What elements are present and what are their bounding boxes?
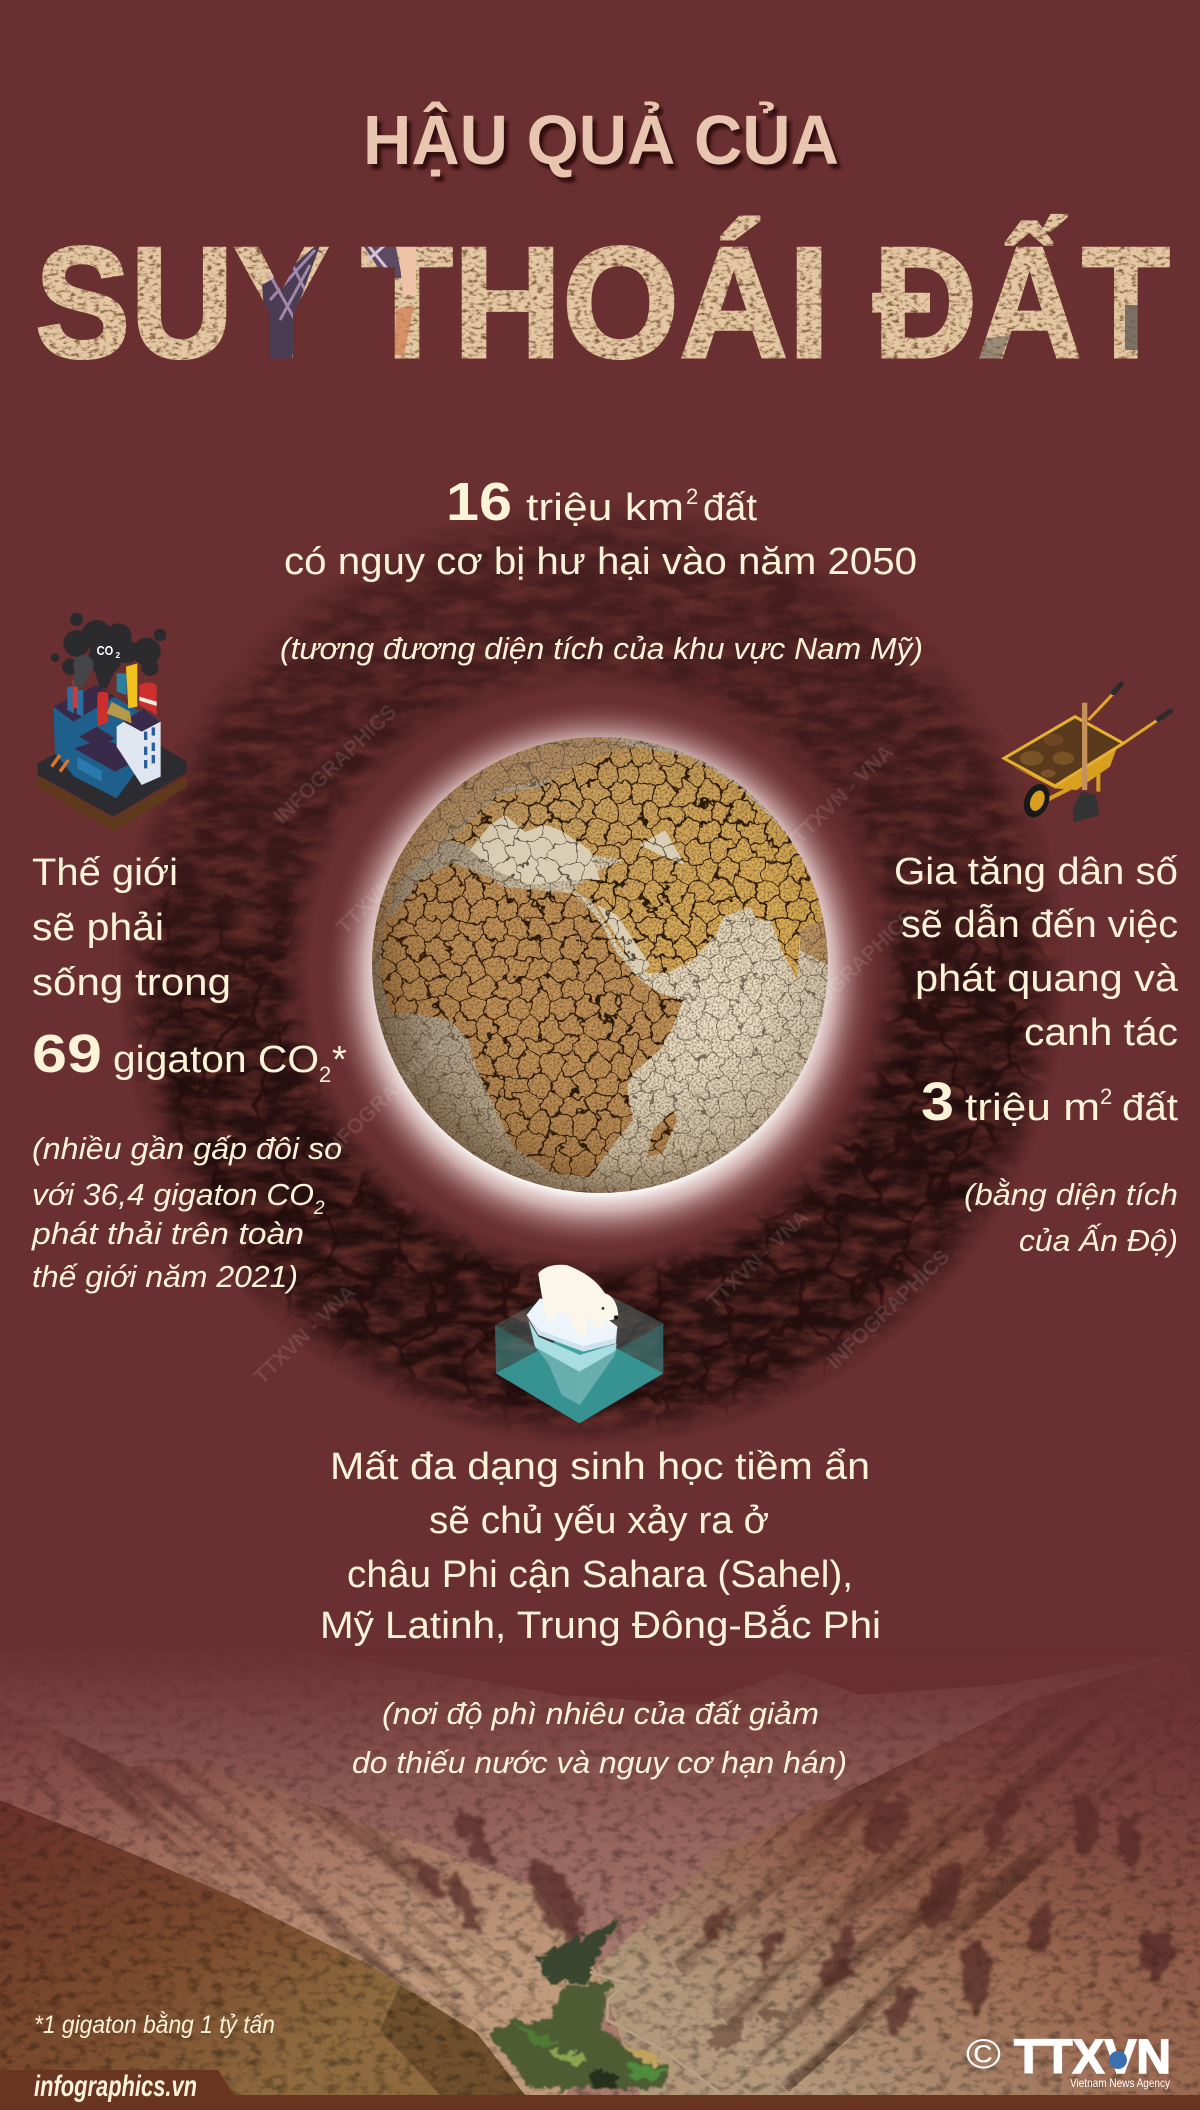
- cracks: sea: [360, 725, 840, 1205]
- text block: CO2 left: 2: [313, 1198, 325, 1219]
- title line 2 textured: [35, 215, 1170, 391]
- text block: CO2 left: 69: [32, 1024, 102, 1084]
- text block: top statistic: đất: [703, 487, 757, 529]
- text block: population right: sẽ dẫn đến việc: [901, 903, 1178, 946]
- text block: biodiversity: Mỹ Latinh, Trung Đông-Bắc Phi: [320, 1604, 881, 1647]
- seas: [470, 815, 685, 975]
- text block: CO2 left: phát thải trên toàn: [31, 1216, 304, 1251]
- icon: factory with CO2 smoke: 2: [116, 651, 121, 660]
- logo: TTXVN: TTXVN: [1014, 2031, 1171, 2084]
- cracked earth ring: [123, 506, 1062, 1442]
- text block: CO2 left: [31, 852, 347, 1294]
- text block: biodiversity: (nơi độ phì nhiêu của đất giảm: [382, 1696, 819, 1731]
- text block: top statistic: có nguy cơ bị hư hại vào năm 2050: [284, 541, 917, 583]
- globe glow: [325, 700, 875, 1250]
- icon: factory with CO2 smoke: [38, 613, 187, 832]
- watermarks: [249, 700, 954, 1389]
- text block: CO2 left: với 36,4 gigaton CO: [32, 1177, 314, 1212]
- footnote: *1 gigaton bằng 1 tỷ tấn: [34, 2010, 275, 2039]
- watermarks: TTXVN: [332, 874, 398, 939]
- title line 2 textured: THOÁI: [361, 215, 830, 391]
- text block: top statistic: 16: [446, 472, 512, 532]
- title line 1: HẬU QUẢ CỦA: [363, 100, 839, 179]
- globe: cracked earth: [360, 725, 840, 1205]
- dark rock patches: [409, 1785, 1173, 2036]
- text block: population right: của Ấn Độ): [1019, 1222, 1178, 1258]
- watermarks: TTXVN - VNA: [702, 1205, 813, 1314]
- watermarks: TTXVN - VNA: [249, 1280, 360, 1389]
- watermarks: INFOGRAPHICS: [787, 905, 919, 1034]
- text block: CO2 left: sẽ phải: [32, 907, 164, 949]
- title line 2 textured: SUY: [35, 215, 329, 391]
- title line 2 textured: ĐẤT: [873, 215, 1170, 391]
- text block: population right: phát quang và: [915, 958, 1179, 1000]
- cracks: land: [381, 748, 819, 1177]
- text block: population right: [894, 851, 1179, 1258]
- text block: population right: 3: [921, 1072, 954, 1132]
- text block: biodiversity: [320, 1446, 881, 1780]
- text block: biodiversity: do thiếu nước và nguy cơ hạn hán): [352, 1745, 847, 1780]
- logo: TTXVN: [966, 2030, 1171, 2090]
- text block: top statistic: triệu km: [526, 487, 684, 529]
- text block: population right: (bằng diện tích: [964, 1177, 1178, 1212]
- watermarks: TTXVN - VNA: [787, 740, 898, 849]
- text block: biodiversity: sẽ chủ yếu xảy ra ở: [429, 1500, 769, 1542]
- text block: CO2 left: (nhiều gần gấp đôi so: [32, 1131, 342, 1166]
- source site: infographics.vn: [34, 2070, 197, 2103]
- icon: polar bear on melting ice: [495, 1265, 663, 1423]
- text block: biodiversity: Mất đa dạng sinh học tiềm ẩn: [330, 1446, 870, 1488]
- mountain landscape: [0, 1568, 1200, 2097]
- land: Madagascar: [647, 1110, 677, 1157]
- text block: population right: 2: [1100, 1084, 1112, 1109]
- logo: TTXVN: ©: [966, 2030, 1001, 2077]
- watermarks: INFOGRAPHICS: [822, 1245, 954, 1374]
- icon: factory with CO2 smoke: CO: [97, 644, 113, 658]
- watermarks: INFOGRAPHICS: [317, 1035, 449, 1164]
- land: Africa: [380, 863, 683, 1177]
- text block: top statistic: [280, 472, 923, 666]
- footer bar: [0, 2070, 1200, 2110]
- text block: population right: đất: [1122, 1087, 1178, 1129]
- text block: top statistic: 2: [686, 484, 698, 509]
- text block: population right: triệu m: [965, 1087, 1100, 1129]
- text block: CO2 left: 2: [319, 1062, 331, 1087]
- watermarks: INFOGRAPHICS: [269, 700, 401, 829]
- text block: CO2 left: *: [332, 1039, 347, 1081]
- text block: population right: canh tác: [1024, 1012, 1178, 1054]
- icon: wheelbarrow with shovel: [1004, 684, 1171, 822]
- valley road: [590, 1972, 720, 2093]
- logo: TTXVN: Vietnam News Agency: [1070, 2076, 1170, 2090]
- land: Eurasia: [450, 747, 823, 980]
- text block: CO2 left: sống trong: [32, 962, 231, 1004]
- text block: CO2 left: Thế giới: [32, 852, 178, 894]
- valley vegetation: [488, 1918, 668, 2088]
- text block: population right: Gia tăng dân số: [894, 851, 1178, 893]
- text block: top statistic: (tương đương diện tích của khu vực Nam Mỹ): [280, 631, 923, 666]
- text block: CO2 left: gigaton CO: [113, 1039, 319, 1081]
- text block: CO2 left: thế giới năm 2021): [32, 1259, 298, 1294]
- village ruins: [708, 2008, 790, 2052]
- text block: biodiversity: châu Phi cận Sahara (Sahel),: [347, 1554, 853, 1596]
